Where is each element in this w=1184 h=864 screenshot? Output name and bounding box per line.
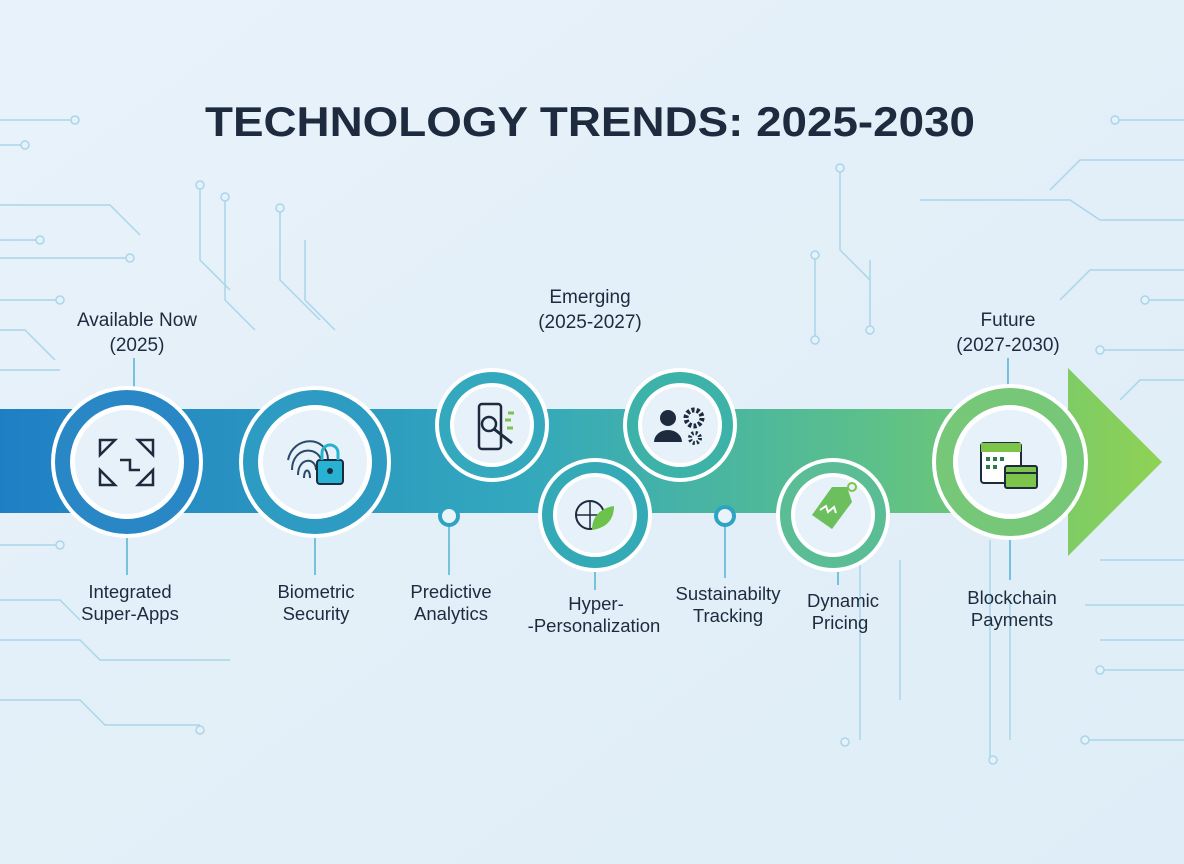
phase label: available now: (2025) — [110, 335, 164, 356]
circle: dynamic pricing — [776, 458, 890, 572]
circle: blockchain payments — [932, 384, 1088, 540]
item labels: Dynamic — [807, 590, 879, 611]
item labels: Tracking — [693, 605, 763, 626]
item labels: Payments — [971, 609, 1053, 630]
item labels: Blockchain — [967, 587, 1057, 608]
item labels: Analytics — [414, 603, 488, 624]
item labels: Pricing — [812, 612, 868, 633]
phase label: available now: Available Now — [77, 310, 197, 331]
phase label: future: Future — [981, 310, 1035, 331]
phase label: emerging — [538, 287, 642, 333]
phase label: future: (2027-2030) — [956, 335, 1060, 356]
item labels: Predictive — [410, 581, 492, 602]
phase label: emerging: Emerging — [549, 287, 631, 308]
circle: super-apps — [51, 386, 203, 538]
connector dots — [440, 507, 734, 525]
circle: sustainability — [538, 458, 652, 572]
circle: hyper-personalization — [623, 368, 737, 482]
phase label: available now — [77, 310, 197, 356]
item labels: Security — [283, 603, 350, 624]
item labels: Integrated — [88, 581, 172, 602]
title: TECHNOLOGY TRENDS: 2025-2030 — [205, 98, 975, 145]
timeline arrow — [0, 368, 1162, 556]
item labels: Hyper- — [568, 593, 624, 614]
item labels: -Personalization — [528, 615, 660, 636]
item labels: Super-Apps — [81, 603, 179, 624]
item labels: Sustainabilty — [676, 583, 781, 604]
item labels: Biometric — [277, 581, 355, 602]
circle: biometric — [239, 386, 391, 538]
phase label: future — [956, 310, 1060, 356]
phase label: emerging: (2025-2027) — [538, 312, 642, 333]
circle: predictive analytics — [435, 368, 549, 482]
item labels — [81, 581, 1057, 636]
